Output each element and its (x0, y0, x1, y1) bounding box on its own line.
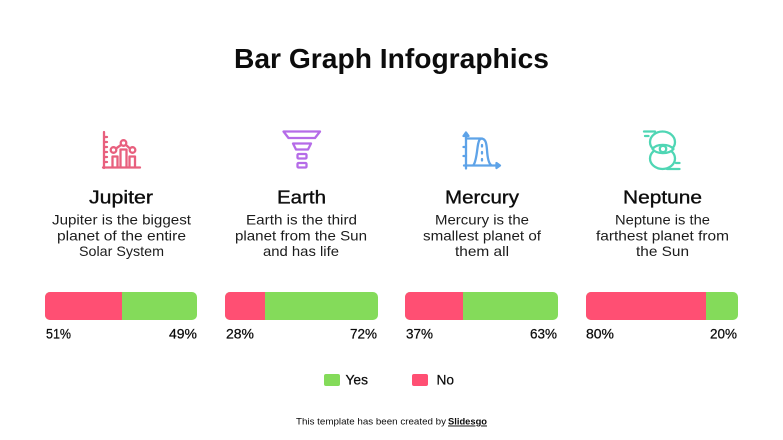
legend item: Yes: Yes (346, 372, 368, 388)
bar: Earth 28 / 72 (225, 292, 378, 320)
text: Jupiter description (52, 212, 191, 259)
icon: funnel (284, 132, 320, 168)
text: Mercury description: smallest planet of (423, 228, 541, 244)
text: Jupiter description: planet of the entire (57, 228, 186, 244)
text: Earth description: Earth is the third (246, 212, 357, 228)
text: Mercury description: Mercury is the (435, 212, 529, 228)
text: Neptune description: Neptune is the (615, 212, 710, 228)
text: Neptune description: farthest planet from (596, 228, 729, 244)
value: 72%: 72% (350, 326, 377, 342)
text: Mercury description (423, 212, 541, 259)
bar: Mercury 37 / 63 (405, 292, 558, 320)
legend (324, 372, 454, 388)
icon: distribution curve with axes (464, 132, 500, 168)
title: Bar Graph Infographics (234, 43, 549, 74)
value: 49%: 49% (169, 326, 197, 342)
panel: Jupiter (45, 132, 197, 342)
footer credit: This template has been created by (296, 416, 446, 428)
text: Earth description: planet from the Sun (235, 228, 367, 244)
text: Neptune description (596, 212, 729, 259)
text: Jupiter description: Solar System (79, 243, 164, 259)
value: 63%: 63% (530, 326, 557, 342)
heading: Earth: Earth (277, 188, 326, 208)
text: Jupiter description: Jupiter is the biggest (52, 212, 191, 228)
bar: Neptune 80 / 20 (586, 292, 738, 320)
value: 37%: 37% (406, 326, 433, 342)
icon: bar chart with line (103, 132, 140, 168)
bar: Jupiter 51 / 49 (45, 292, 197, 320)
panel: Earth (225, 132, 378, 342)
text: Neptune description: the Sun (636, 243, 689, 259)
icon: eye with orbits (644, 132, 680, 169)
heading: Neptune: Neptune (623, 188, 702, 208)
footer credit: Slidesgo (448, 416, 487, 428)
value: 28%: 28% (226, 326, 254, 342)
legend item: No: No (436, 372, 454, 388)
text: Earth description (235, 212, 367, 259)
value: 20%: 20% (710, 326, 737, 342)
value: 51%: 51% (46, 326, 71, 342)
text: Earth description: and has life (263, 243, 339, 259)
text: Mercury description: them all (455, 243, 509, 259)
panel: Neptune (586, 132, 738, 342)
panel: Mercury (405, 132, 558, 342)
heading: Mercury: Mercury (445, 188, 519, 208)
heading: Jupiter: Jupiter (89, 188, 153, 208)
value: 80%: 80% (586, 326, 614, 342)
